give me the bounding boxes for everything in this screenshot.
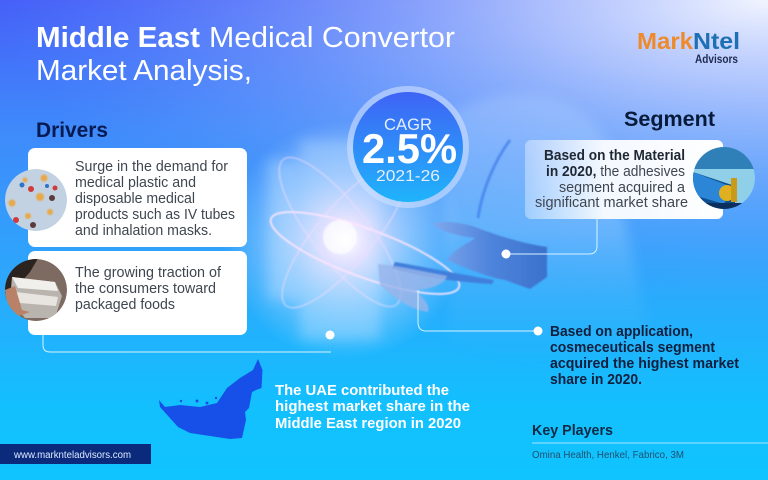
heading: Segment: Segment xyxy=(624,108,715,131)
logo: MarkNtel Advisors: Mark xyxy=(637,28,693,54)
logo: MarkNtel Advisors: Advisors xyxy=(695,54,738,66)
card: segment material: significant market share xyxy=(535,195,688,211)
key players: Key Players xyxy=(532,422,613,439)
logo: MarkNtel Advisors: Ntel xyxy=(693,28,740,54)
card: driver 1: products such as IV tubes xyxy=(75,207,235,223)
title xyxy=(36,22,456,87)
CAGR badge: 2021-26 xyxy=(376,168,440,185)
key players xyxy=(532,422,768,461)
card: driver 2: packaged foods xyxy=(75,297,175,313)
icon: adhesive tube with coins xyxy=(693,147,755,212)
key players: Omina Health, Henkel, Fabrico, 3M xyxy=(532,449,684,461)
card: segment material xyxy=(525,140,723,219)
text: UAE share: Middle East region in 2020 xyxy=(275,416,461,432)
atom illustration xyxy=(261,142,467,323)
card: driver 1: Surge in the demand for xyxy=(75,159,228,175)
doctor hand and tablet xyxy=(378,140,547,312)
CAGR badge: 2.5% xyxy=(362,125,457,172)
title: Middle East xyxy=(36,22,201,54)
text: application segment: share in 2020. xyxy=(550,372,642,388)
card: segment material: segment acquired a xyxy=(559,180,686,196)
card: driver 2: The growing traction of xyxy=(75,265,222,281)
card: driver 2: the consumers toward xyxy=(75,281,216,297)
card: segment material: in 2020, the adhesives xyxy=(546,164,685,180)
text: application segment xyxy=(550,324,739,388)
icon: medical plastics photo xyxy=(5,169,67,231)
text: UAE share xyxy=(275,383,470,432)
title: Medical Convertor xyxy=(209,22,456,54)
card: segment material: Based on the Material xyxy=(544,148,685,164)
card: driver 2 xyxy=(28,251,247,335)
text: UAE share: The UAE contributed the xyxy=(275,383,449,399)
card: driver 1: medical plastic and xyxy=(75,175,196,191)
map: UAE xyxy=(159,359,262,439)
icon: packaged foods photo xyxy=(5,255,67,321)
CAGR badge: CAGR xyxy=(384,115,432,134)
text: application segment: acquired the highest market xyxy=(550,356,739,372)
dot: atom connector xyxy=(326,330,334,340)
card: driver 1: and inhalation masks. xyxy=(75,223,212,239)
website bar: www.marknteladvisors.com xyxy=(13,450,131,461)
title: Market Analysis, xyxy=(36,55,252,87)
card: driver 1: disposable medical xyxy=(75,191,195,207)
heading: Drivers: Drivers xyxy=(36,119,108,142)
logo: MarkNtel Advisors xyxy=(637,28,740,66)
connector: drivers xyxy=(43,335,331,352)
connector: application segment xyxy=(418,290,542,336)
text: application segment: cosmeceuticals segment xyxy=(550,340,715,356)
text: application segment: Based on application, xyxy=(550,324,693,340)
website bar xyxy=(0,444,151,464)
CAGR badge xyxy=(347,86,469,208)
card: driver 1 xyxy=(28,148,247,247)
connector: material segment xyxy=(502,219,597,258)
text: UAE share: highest market share in the xyxy=(275,399,470,415)
